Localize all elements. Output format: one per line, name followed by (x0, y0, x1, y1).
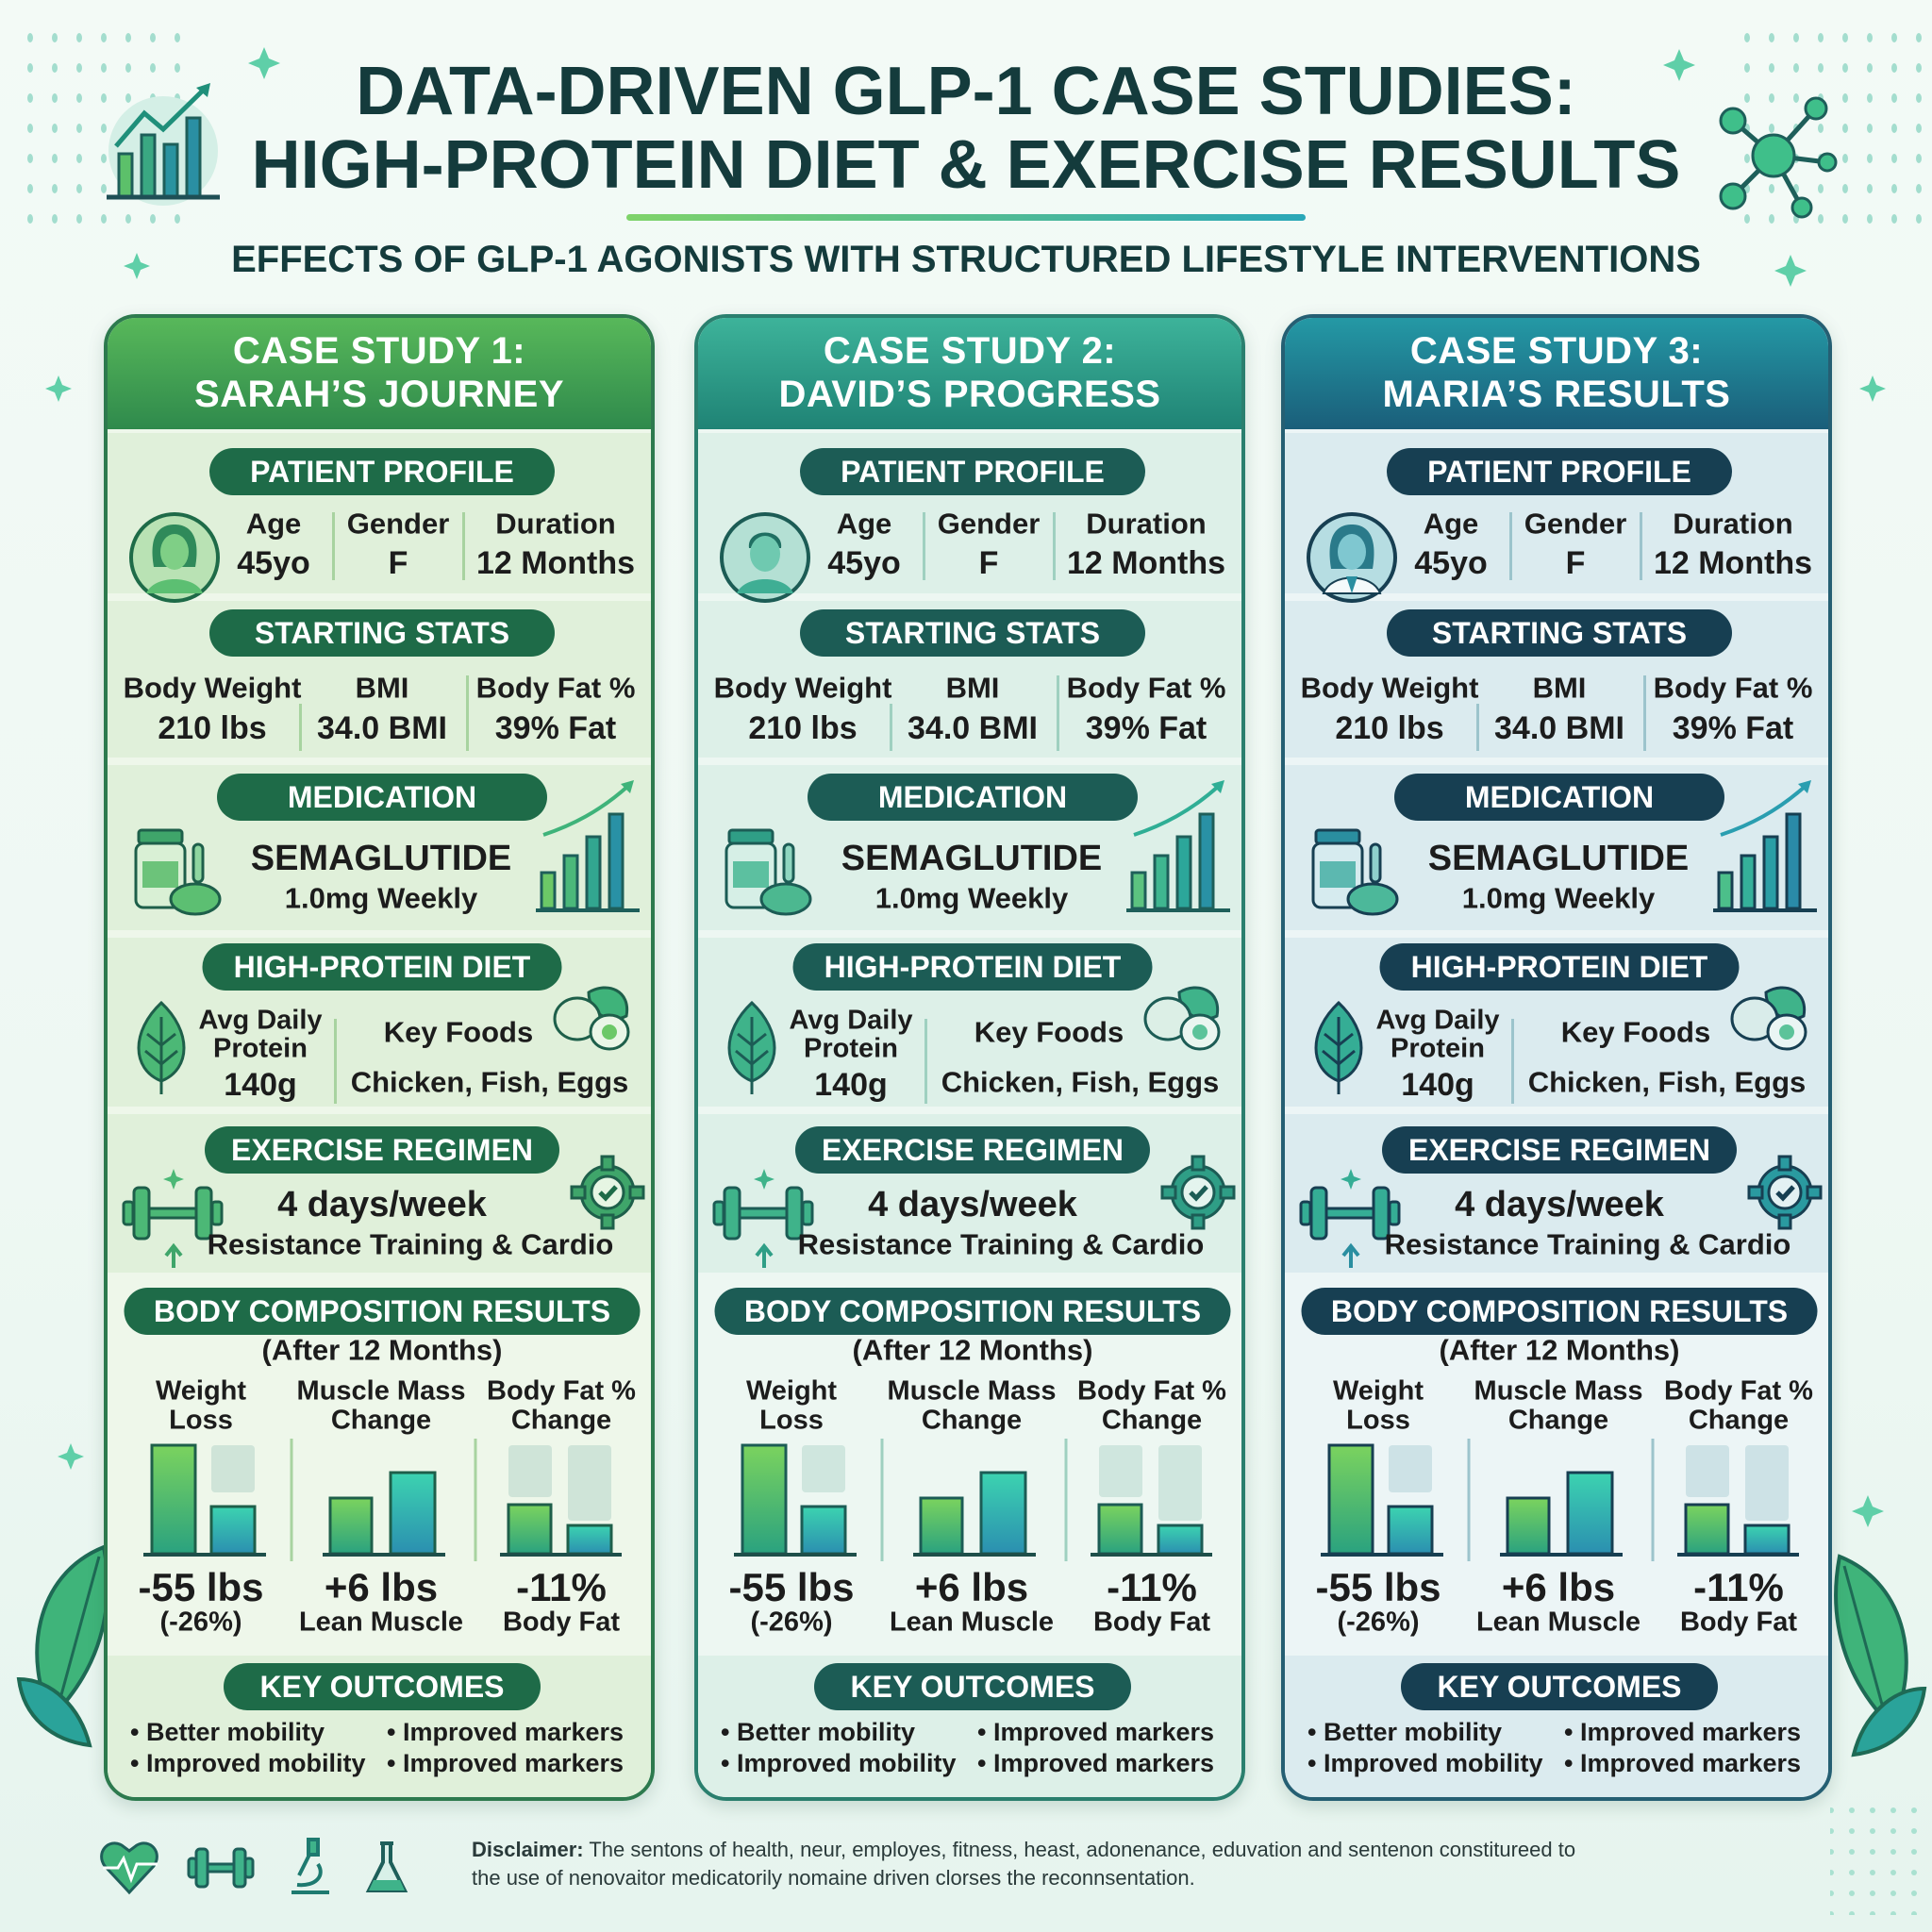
icon: growth bars (536, 780, 640, 912)
title (252, 54, 1680, 203)
section: exercise regimen (123, 1126, 645, 1268)
section: body composition results: Muscle Mass (297, 1375, 465, 1406)
subtitle: EFFECTS OF GLP-1 AGONISTS WITH STRUCTURED LIFESTYLE INTERVENTIONS (231, 239, 1701, 280)
section: body composition results: Change (1689, 1406, 1789, 1436)
section: starting stats: BMI (946, 672, 999, 704)
section: patient profile: PATIENT PROFILE (1427, 455, 1691, 489)
section: patient profile: PATIENT PROFILE (250, 455, 514, 489)
section: key outcomes: KEY OUTCOMES (851, 1670, 1094, 1704)
section: body composition results: -55 lbs (728, 1565, 855, 1609)
section: patient profile: Age (246, 508, 301, 540)
section: body composition results: Loss (1346, 1406, 1410, 1436)
section: exercise regimen (713, 1126, 1236, 1268)
icon: dumbbell (1296, 1169, 1405, 1273)
section: key outcomes (721, 1663, 1214, 1777)
section: starting stats: 34.0 BMI (908, 710, 1038, 746)
icon: growth bars (1713, 780, 1817, 912)
section: patient profile (1307, 448, 1812, 603)
panel: case study 1 (104, 314, 655, 1801)
icon: eggs (553, 987, 630, 1051)
section: body composition results (715, 1288, 1230, 1638)
section: starting stats: 39% Fat (1086, 710, 1207, 746)
section: starting stats: 39% Fat (1673, 710, 1793, 746)
section: high-protein diet (1285, 943, 1836, 1104)
section: body composition results: Muscle Mass (1474, 1375, 1642, 1406)
section: high-protein diet: Protein (1391, 1034, 1485, 1064)
section: patient profile: Gender (347, 508, 449, 540)
section: body composition results: Weight (156, 1375, 246, 1406)
section: body composition results: Change (511, 1406, 611, 1436)
icon: leaf (1304, 998, 1374, 1097)
icon: gear check (1747, 1155, 1823, 1230)
section: patient profile: 45yo (827, 545, 901, 581)
panel: case study 3 (1281, 314, 1832, 1801)
section: exercise regimen: 4 days/week (1455, 1185, 1664, 1224)
section: body composition results: -11% (1693, 1565, 1784, 1609)
title: DATA-DRIVEN GLP-1 CASE STUDIES: (356, 54, 1576, 129)
card header: DAVID’S PROGRESS (778, 374, 1161, 415)
section: body composition results: -11% (516, 1565, 607, 1609)
section: key outcomes: • Better mobility (130, 1718, 325, 1746)
icon: pill bottle (724, 828, 811, 915)
section: exercise regimen: Resistance Training & Cardio (798, 1228, 1204, 1260)
section: key outcomes: KEY OUTCOMES (1438, 1670, 1681, 1704)
section: body composition results: (-26%) (159, 1607, 242, 1638)
section: starting stats: BMI (356, 672, 408, 704)
section: high-protein diet: 140g (224, 1067, 297, 1103)
section: starting stats: Body Weight (714, 672, 891, 704)
section: body composition results: BODY COMPOSITION RESULTS (154, 1294, 610, 1328)
section: high-protein diet: Avg Daily (789, 1006, 913, 1036)
section: body composition results: +6 lbs (325, 1565, 438, 1609)
section: body composition results: (After 12 Months) (262, 1334, 502, 1366)
icon: avatar doctor (1307, 512, 1397, 603)
section: key outcomes (130, 1663, 624, 1777)
section: body composition results: (After 12 Months) (1440, 1334, 1679, 1366)
section: body composition results: -11% (1107, 1565, 1197, 1609)
card header: CASE STUDY 3: (1410, 330, 1703, 372)
section: body composition results: Weight (746, 1375, 837, 1406)
section: body composition results: +6 lbs (915, 1565, 1028, 1609)
section: high-protein diet: 140g (1401, 1067, 1474, 1103)
icon: molecule (1719, 96, 1838, 219)
section: body composition results: +6 lbs (1502, 1565, 1615, 1609)
section: starting stats: Body Weight (1301, 672, 1478, 704)
section: high-protein diet: Avg Daily (1375, 1006, 1500, 1036)
section: starting stats: 210 lbs (1335, 710, 1444, 746)
section: high-protein diet: Key Foods (1561, 1015, 1710, 1049)
section: body composition results: Change (1102, 1406, 1202, 1436)
section: body composition results: (After 12 Months) (853, 1334, 1092, 1366)
section: body composition results: Body Fat % (1664, 1375, 1813, 1406)
section: medication: 1.0mg Weekly (1462, 881, 1655, 915)
section: patient profile (129, 448, 635, 603)
section: body composition results: BODY COMPOSITION RESULTS (1331, 1294, 1788, 1328)
section: body composition results: Body Fat (1093, 1607, 1210, 1638)
section: starting stats: Body Fat % (1067, 672, 1225, 704)
bar chart: results (143, 1439, 622, 1561)
section: exercise regimen: EXERCISE REGIMEN (1408, 1133, 1710, 1167)
section: body composition results (1285, 1288, 1836, 1646)
section: body composition results: (-26%) (1337, 1607, 1420, 1638)
section: high-protein diet: HIGH-PROTEIN DIET (1411, 950, 1707, 984)
section: body composition results: Lean Muscle (1476, 1607, 1641, 1638)
section: body composition results: Change (331, 1406, 431, 1436)
section: high-protein diet: Key Foods (384, 1015, 533, 1049)
card header (1285, 318, 1828, 429)
card header (698, 318, 1241, 429)
section: body composition results: Body Fat (1680, 1607, 1797, 1638)
icon: avatar (720, 512, 810, 603)
icon: dumbbell (713, 1169, 813, 1268)
section: body composition results: (-26%) (750, 1607, 833, 1638)
section: key outcomes: • Better mobility (721, 1718, 915, 1746)
section: medication: SEMAGLUTIDE (841, 839, 1102, 878)
section: medication: 1.0mg Weekly (875, 881, 1068, 915)
card header (108, 318, 651, 429)
section: patient profile: Gender (938, 508, 1040, 540)
section: starting stats (1301, 609, 1812, 751)
section: starting stats: 34.0 BMI (317, 710, 447, 746)
section: medication: MEDICATION (878, 780, 1067, 814)
section: exercise regimen: Resistance Training & Cardio (208, 1228, 613, 1260)
section: patient profile (720, 448, 1225, 603)
section: high-protein diet: HIGH-PROTEIN DIET (234, 950, 530, 984)
section: starting stats (124, 609, 635, 751)
section: starting stats: 34.0 BMI (1494, 710, 1624, 746)
icon: leaf (728, 1001, 775, 1094)
section: starting stats: 39% Fat (495, 710, 616, 746)
icon: avatar (129, 512, 220, 603)
section: high-protein diet: Protein (804, 1034, 898, 1064)
section: exercise regimen: EXERCISE REGIMEN (822, 1133, 1124, 1167)
icon: growth bars (1126, 780, 1230, 912)
section: medication: SEMAGLUTIDE (251, 839, 511, 878)
section: starting stats: STARTING STATS (845, 616, 1100, 650)
section: key outcomes: • Improved markers (977, 1749, 1214, 1777)
bar chart: results (1285, 1439, 1836, 1561)
section: exercise regimen (1285, 1126, 1836, 1277)
section: body composition results: Change (1508, 1406, 1608, 1436)
section: body composition results: Lean Muscle (299, 1607, 463, 1638)
section: starting stats: Body Fat % (476, 672, 635, 704)
section: high-protein diet: Key Foods (974, 1015, 1124, 1049)
section: starting stats: Body Weight (124, 672, 301, 704)
section: patient profile: F (979, 545, 998, 581)
section: medication: MEDICATION (1465, 780, 1654, 814)
icon: eggs (1728, 983, 1813, 1058)
section: patient profile: 45yo (237, 545, 310, 581)
icon: eggs (1143, 987, 1221, 1051)
section: key outcomes: • Improved markers (1564, 1718, 1801, 1746)
section: body composition results: Lean Muscle (890, 1607, 1054, 1638)
section: high-protein diet: 140g (814, 1067, 888, 1103)
section: starting stats: 210 lbs (158, 710, 267, 746)
section: exercise regimen: 4 days/week (868, 1185, 1077, 1224)
section: starting stats: 210 lbs (748, 710, 858, 746)
decoration: bottom leaves (17, 1545, 104, 1747)
section: starting stats: STARTING STATS (255, 616, 509, 650)
section: medication (724, 774, 1230, 915)
section: patient profile: 45yo (1414, 545, 1488, 581)
section: body composition results: Weight (1333, 1375, 1424, 1406)
section: high-protein diet: Protein (213, 1034, 308, 1064)
disclaimer: Disclaimer: The sentons of health, neur, employes, fitness, heast, adonenance, eduvation and sentenon constitureed to the use of nenovaitor medicatorily nomaine driven clorses the reconnsentation. (472, 1838, 1575, 1890)
section: exercise regimen: EXERCISE REGIMEN (231, 1133, 533, 1167)
section: body composition results: -55 lbs (138, 1565, 264, 1609)
icon: pill bottle (1311, 828, 1398, 915)
section: body composition results: -55 lbs (1315, 1565, 1441, 1609)
section: body composition results: Body Fat (503, 1607, 620, 1638)
card header: MARIA’S RESULTS (1382, 374, 1730, 415)
section: medication (134, 774, 640, 915)
section: key outcomes (1285, 1663, 1836, 1786)
card header: CASE STUDY 2: (824, 330, 1116, 372)
icon: dumbbell (123, 1169, 223, 1268)
section: starting stats: BMI (1533, 672, 1586, 704)
section: high-protein diet (728, 943, 1221, 1104)
section: high-protein diet: HIGH-PROTEIN DIET (824, 950, 1121, 984)
section: high-protein diet (138, 943, 630, 1104)
section: high-protein diet: Chicken, Fish, Eggs (1528, 1066, 1806, 1098)
section: exercise regimen: Resistance Training & Cardio (1385, 1228, 1790, 1260)
section: patient profile: PATIENT PROFILE (841, 455, 1105, 489)
section: key outcomes: • Improved markers (387, 1749, 624, 1777)
section: key outcomes: • Improved mobility (721, 1749, 957, 1777)
section: patient profile: F (1566, 545, 1585, 581)
section: key outcomes: • Better mobility (1307, 1718, 1502, 1746)
section: patient profile: 12 Months (1067, 545, 1225, 581)
icon: gear check (570, 1155, 645, 1230)
section: starting stats: Body Fat % (1654, 672, 1812, 704)
section: body composition results: BODY COMPOSITION RESULTS (744, 1294, 1201, 1328)
section: patient profile: Duration (495, 508, 616, 540)
card header: CASE STUDY 1: (233, 330, 525, 372)
section: body composition results: Body Fat % (487, 1375, 636, 1406)
section: patient profile: 12 Months (476, 545, 635, 581)
section: medication: SEMAGLUTIDE (1428, 839, 1689, 878)
title: HIGH-PROTEIN DIET & EXERCISE RESULTS (252, 127, 1680, 203)
section: body composition results: Muscle Mass (888, 1375, 1056, 1406)
section: key outcomes: • Improved markers (977, 1718, 1214, 1746)
section: body composition results: Loss (759, 1406, 824, 1436)
footer icons (99, 1838, 420, 1899)
bar chart: results (734, 1439, 1212, 1561)
section: high-protein diet: Avg Daily (198, 1006, 323, 1036)
section: key outcomes: • Improved markers (387, 1718, 624, 1746)
section: high-protein diet: Chicken, Fish, Eggs (351, 1066, 628, 1098)
section: body composition results: Body Fat % (1077, 1375, 1226, 1406)
section: patient profile: Gender (1524, 508, 1626, 540)
section: key outcomes: • Improved markers (1564, 1749, 1801, 1777)
section: patient profile: Duration (1673, 508, 1793, 540)
section: starting stats (714, 609, 1225, 751)
section: patient profile: Age (1424, 508, 1478, 540)
icon: pill bottle (134, 828, 221, 915)
icon: gear check (1160, 1155, 1236, 1230)
section: key outcomes: • Improved mobility (130, 1749, 366, 1777)
section: medication: MEDICATION (288, 780, 476, 814)
section: key outcomes: KEY OUTCOMES (260, 1670, 504, 1704)
icon: leaf (138, 1001, 185, 1094)
section: medication (1311, 774, 1817, 915)
section: starting stats: STARTING STATS (1432, 616, 1687, 650)
icon: header growth chart (107, 83, 220, 206)
section: body composition results: Change (922, 1406, 1022, 1436)
section: patient profile: 12 Months (1654, 545, 1812, 581)
section: body composition results: Loss (169, 1406, 233, 1436)
title underline (626, 214, 1306, 221)
panel: case study 2 (694, 314, 1245, 1801)
section: patient profile: F (389, 545, 408, 581)
section: body composition results (125, 1288, 640, 1638)
section: patient profile: Age (837, 508, 891, 540)
card header: SARAH’S JOURNEY (194, 374, 564, 415)
section: patient profile: Duration (1086, 508, 1207, 540)
section: high-protein diet: Chicken, Fish, Eggs (941, 1066, 1219, 1098)
section: key outcomes: • Improved mobility (1307, 1749, 1543, 1777)
section: exercise regimen: 4 days/week (277, 1185, 487, 1224)
section: medication: 1.0mg Weekly (285, 881, 477, 915)
